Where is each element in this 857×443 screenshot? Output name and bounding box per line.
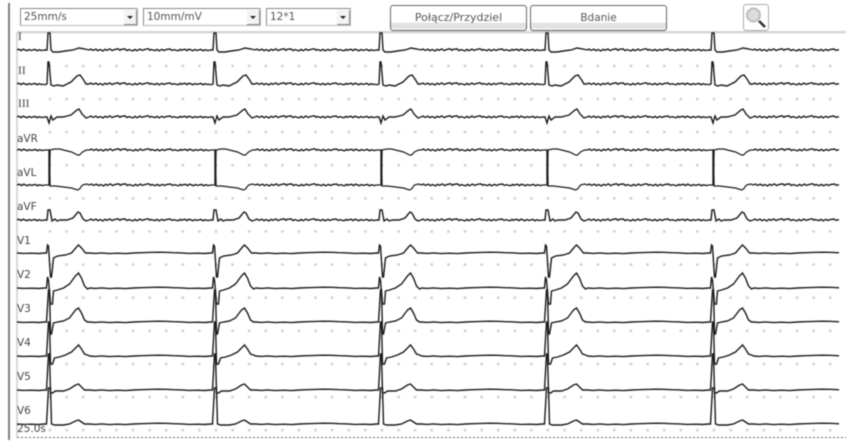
lead V3 [0, 290, 857, 334]
plot top edge [17, 31, 846, 33]
icon: magnifier [743, 4, 769, 31]
lead aVR [0, 133, 857, 185]
lead V1 [0, 235, 857, 277]
lead V3: V3 [17, 303, 31, 315]
button: connect/assign: Połącz/Przydziel [415, 11, 502, 24]
layout dropdown: 12*1 [270, 11, 295, 23]
lead V2 [0, 269, 857, 304]
lead III: III [18, 98, 30, 110]
speed dropdown: 25mm/s [24, 11, 67, 23]
lead aVL: aVL [17, 167, 37, 179]
lead V5: V5 [17, 371, 31, 383]
lead I [0, 31, 857, 52]
time axis dashed line [17, 436, 846, 438]
gain dropdown: 10mm/mV [147, 11, 202, 23]
lead V4 [0, 322, 857, 364]
left frame line [8, 3, 10, 440]
lead V6 [0, 388, 857, 425]
lead II: II [18, 65, 26, 77]
lead aVF [0, 201, 857, 221]
speed dropdown [20, 8, 138, 26]
lead V4: V4 [17, 337, 31, 349]
lead V5 [0, 354, 857, 393]
toolbar [19, 4, 770, 32]
lead aVF: aVF [17, 201, 37, 213]
plot left edge [16, 32, 18, 437]
lead aVR: aVR [17, 133, 38, 145]
button: connect/assign [390, 5, 527, 31]
button: examination [530, 5, 667, 31]
lead aVL [0, 150, 857, 190]
lead V6: V6 [17, 405, 31, 417]
lead I: I [18, 31, 22, 43]
lead III [0, 98, 857, 123]
gain dropdown [143, 8, 261, 26]
button: examination: Bdanie [580, 12, 617, 24]
lead II [0, 62, 857, 86]
lead V2: V2 [17, 269, 31, 281]
time label: 25.0s [17, 423, 46, 435]
layout dropdown [266, 8, 351, 26]
lead V1: V1 [17, 235, 31, 247]
